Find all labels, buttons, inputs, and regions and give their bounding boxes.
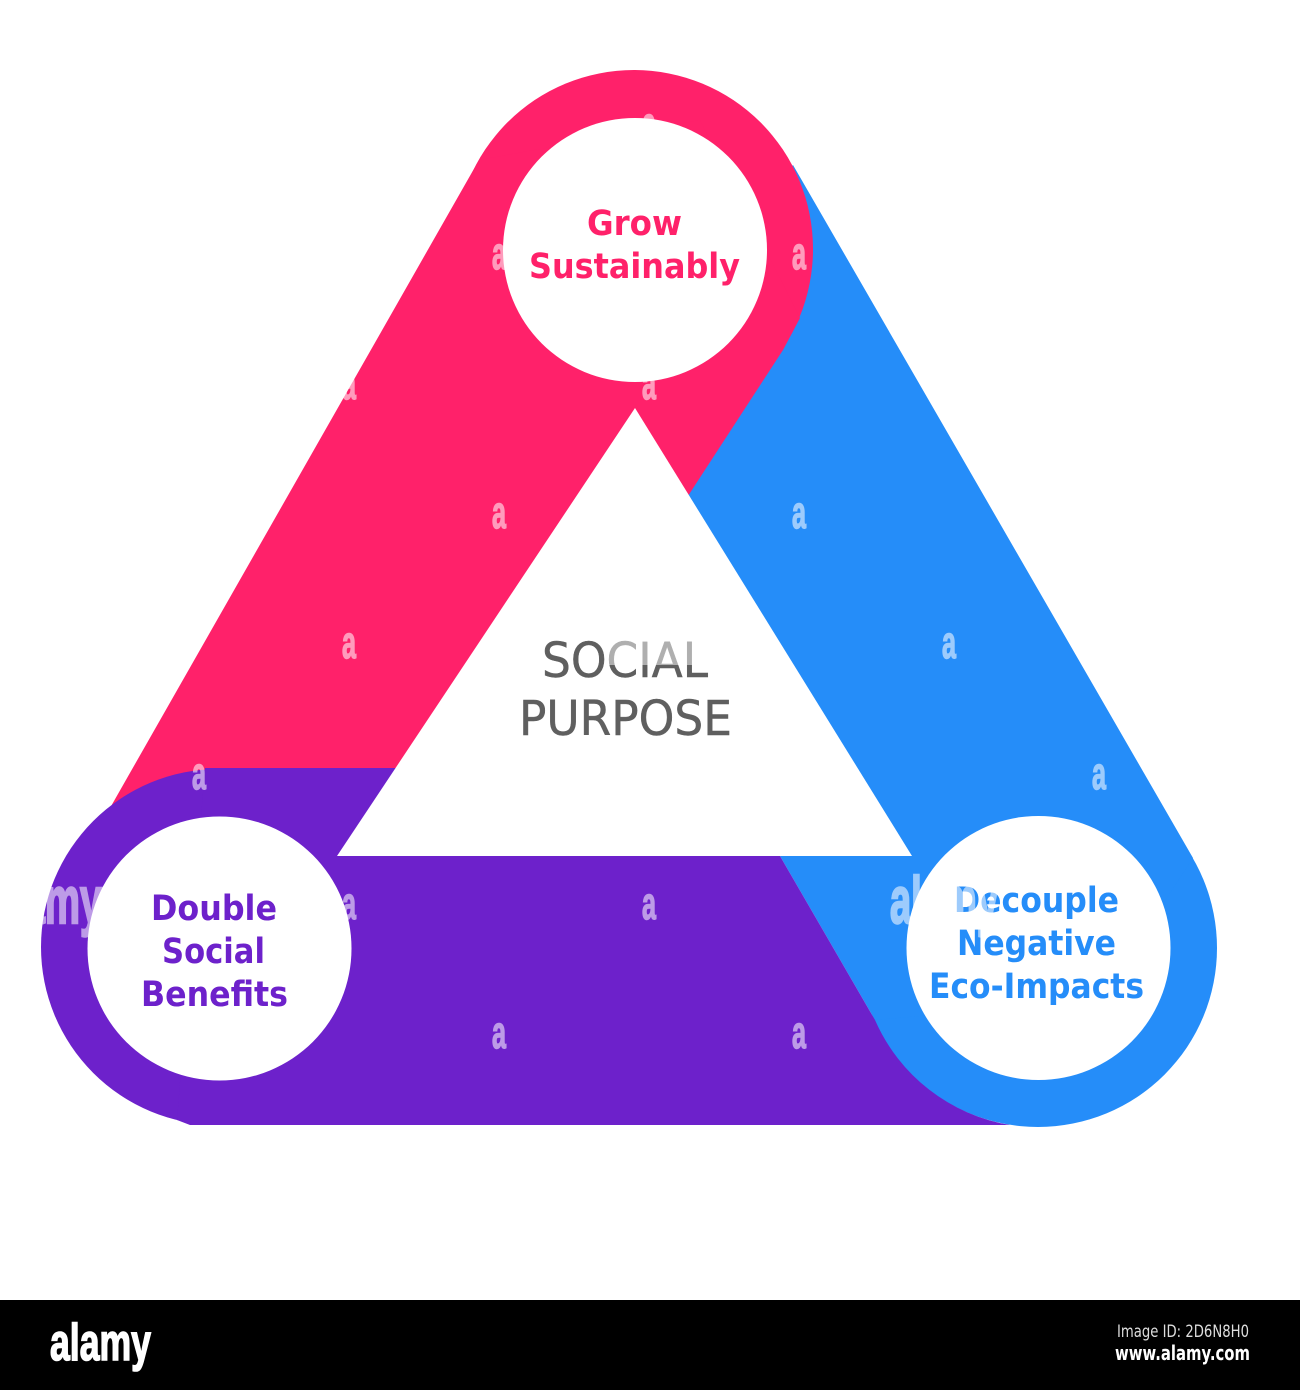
watermark overlay: a: [342, 617, 357, 668]
label: grow sustainably: Sustainably: [529, 247, 740, 287]
label: double social benefits: Benefits: [141, 975, 288, 1015]
label: grow sustainably: [529, 204, 740, 287]
footer image id: Image ID: 2D6N8H0: [1117, 1322, 1249, 1342]
watermark overlay: a: [792, 1007, 807, 1058]
label: decouple negative eco-impacts: Eco-Impacts: [929, 967, 1144, 1007]
watermark overlay: a: [642, 358, 657, 409]
watermark overlay: a: [492, 1007, 507, 1058]
watermark overlay: a: [642, 878, 657, 929]
footer url: www.alamy.com: [1115, 1341, 1250, 1365]
watermark overlay: a: [492, 487, 507, 538]
center title: social purpose: SOCIAL: [542, 633, 708, 689]
label: decouple negative eco-impacts: Negative: [957, 924, 1116, 964]
circle: decouple negative eco-impacts: [906, 816, 1170, 1080]
watermark overlay: a: [1092, 748, 1107, 799]
circle: grow sustainably: [503, 118, 767, 382]
watermark overlay: a: [492, 228, 507, 279]
label: double social benefits: Double: [151, 889, 277, 929]
band: pink grow: [110, 70, 813, 808]
watermark overlay: alamy: [890, 863, 998, 937]
circle: double social benefits: [88, 816, 352, 1080]
footer bar: [0, 1300, 1300, 1390]
watermark overlay: a: [192, 748, 207, 799]
watermark overlay: a: [792, 487, 807, 538]
watermark overlay: a: [342, 878, 357, 929]
label: decouple negative eco-impacts: Decouple: [954, 881, 1119, 921]
label: double social benefits: Social: [162, 932, 265, 972]
footer logo: alamy: [50, 1314, 151, 1372]
center title: social purpose: PURPOSE: [519, 691, 732, 747]
watermark overlay: a: [792, 228, 807, 279]
label: grow sustainably: Grow: [587, 204, 682, 244]
watermark overlay: a: [642, 98, 657, 149]
band: purple social benefits: [41, 768, 1010, 1125]
label: decouple negative eco-impacts: [929, 881, 1144, 1007]
label: double social benefits: [141, 889, 288, 1015]
central white triangle: [337, 408, 912, 856]
band: blue decouple: [660, 165, 1217, 1127]
watermark overlay: a: [342, 358, 357, 409]
center title: social purpose: [519, 633, 732, 747]
watermark overlay: [0, 98, 1107, 1058]
watermark overlay: a: [942, 617, 957, 668]
